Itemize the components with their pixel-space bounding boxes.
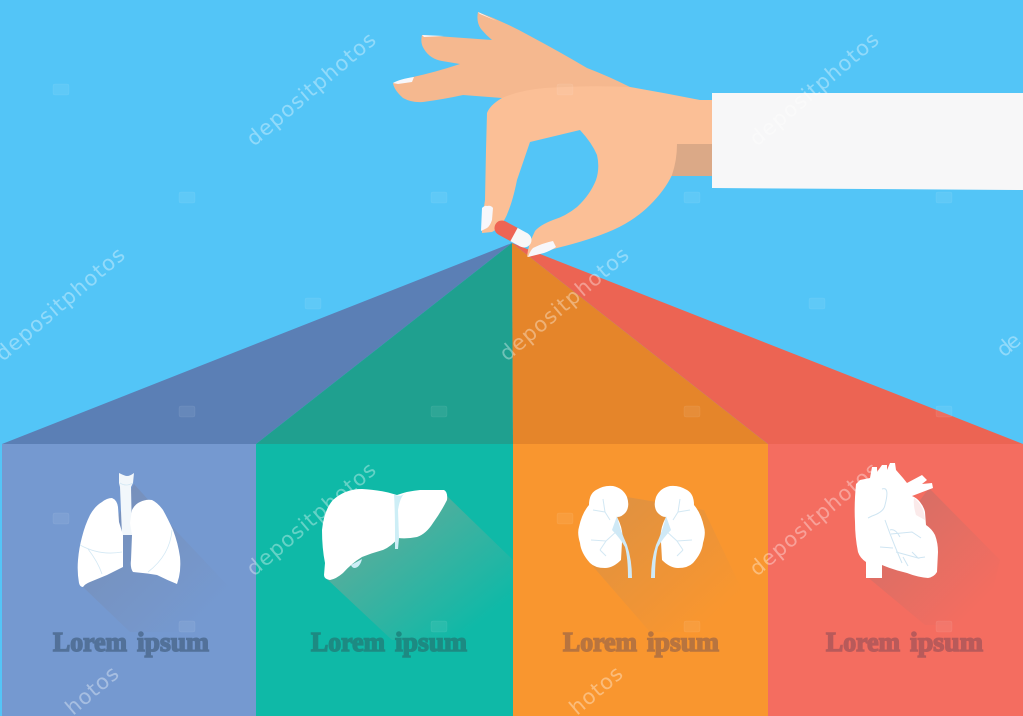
label: Lorem ipsum <box>311 627 468 657</box>
icon: lungs <box>78 473 180 587</box>
icon: heart <box>855 463 938 578</box>
pyramid of coloured rays <box>2 243 1023 444</box>
label: Lorem ipsum: ipsum <box>910 627 984 657</box>
label: Lorem ipsum: ipsum <box>395 627 468 657</box>
nails <box>393 12 556 257</box>
left kidney <box>578 486 632 578</box>
lungs long shadow <box>83 484 232 632</box>
watermark camera icons <box>53 84 952 632</box>
label: Lorem ipsum: Lorem <box>563 627 637 657</box>
pill <box>502 228 532 248</box>
label: Lorem ipsum <box>563 627 720 657</box>
label: Lorem ipsum: ipsum <box>647 627 720 657</box>
watermarks: depositphotos <box>242 28 381 151</box>
panel: lungs <box>2 444 256 716</box>
label: Lorem ipsum: Lorem <box>311 627 385 657</box>
label: Lorem ipsum <box>53 627 210 657</box>
liver long shadow <box>328 496 513 640</box>
panel: kidneys <box>513 444 768 716</box>
label: Lorem ipsum: ipsum <box>137 627 210 657</box>
right kidney <box>651 486 705 578</box>
label: Lorem ipsum <box>826 627 984 657</box>
watermarks: depositphotos <box>495 243 634 366</box>
watermarks: depositphotos <box>745 458 884 581</box>
watermarks: depositphotos <box>745 28 884 151</box>
panel: liver <box>256 444 513 716</box>
palm, index finger and thumb <box>482 86 712 257</box>
hand <box>393 12 712 257</box>
watermarks: depositphotos <box>242 458 381 581</box>
icon: kidneys <box>578 486 705 578</box>
kidneys long shadow <box>590 497 742 632</box>
panel: heart <box>768 444 1023 716</box>
label: Lorem ipsum: Lorem <box>826 627 900 657</box>
icon: liver <box>322 489 447 580</box>
label: Lorem ipsum: Lorem <box>53 627 127 657</box>
heart long shadow <box>865 488 1000 625</box>
wrist shadow <box>670 144 712 176</box>
back fingers <box>393 12 640 102</box>
sleeve <box>712 93 1023 190</box>
